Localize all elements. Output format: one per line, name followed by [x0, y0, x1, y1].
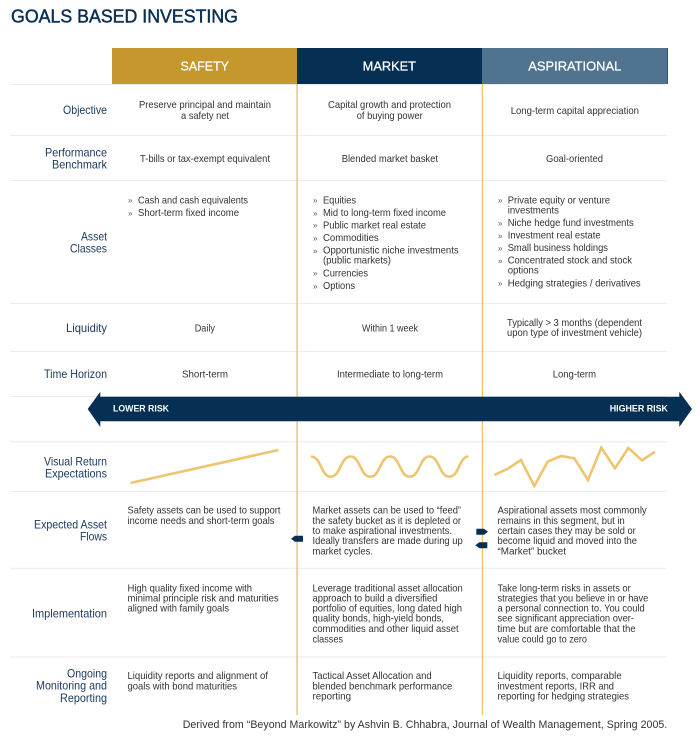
aspirational implementation: value could go to zero [498, 634, 587, 645]
market asset list: » [313, 246, 318, 256]
safety implementation: aligned with family goals [128, 604, 229, 615]
safety flows: income needs and short-term goals [128, 516, 274, 527]
aspirational flows [498, 505, 648, 557]
aspirational asset list: Hedging strategies / derivatives [508, 278, 641, 289]
market flows [312, 505, 463, 557]
higher risk label: HIGHER RISK [610, 404, 668, 414]
market flows: to make aspirational investments. [312, 526, 452, 537]
aspirational asset list: options [508, 266, 539, 277]
market asset list: Options [323, 281, 355, 292]
source footnote: Derived from “Beyond Markowitz” by Ashvin B. Chhabra, Journal of Wealth Management, Spring 2005. [183, 719, 667, 731]
market flows: market cycles. [312, 546, 373, 557]
safety monitoring [128, 671, 268, 693]
header: safety [112, 48, 297, 84]
row: expected asset flows [34, 505, 648, 557]
aspirational asset list: » [498, 219, 503, 228]
market benchmark: Blended market basket [342, 154, 438, 165]
header: market [297, 48, 482, 84]
market monitoring: blended benchmark performance [312, 682, 453, 693]
row: liquidity [66, 318, 642, 339]
aspirational asset list: » [498, 244, 503, 253]
safety asset list: » [128, 196, 133, 205]
market monitoring [312, 671, 453, 703]
market objective [328, 100, 451, 122]
label: performance benchmark [45, 146, 108, 172]
chart: safety straight line [130, 450, 278, 483]
label: ongoing monitoring and reporting: Monitoring and [36, 679, 107, 693]
market asset list: (public markets) [323, 256, 391, 267]
aspirational monitoring: reporting for hedging strategies [498, 692, 629, 703]
aspirational horizon: Long-term [553, 370, 596, 381]
aspirational implementation: Take long-term risks in assets or [498, 584, 631, 595]
label: liquidity: Liquidity [66, 321, 107, 335]
market horizon: Intermediate to long-term [337, 370, 443, 381]
title: GOALS BASED INVESTING [11, 6, 238, 26]
risk arrow [88, 392, 692, 427]
aspirational asset list: Private equity or venture [508, 195, 610, 206]
market implementation: portfolio of equities, long dated high [312, 604, 462, 615]
header: aspirational: ASPIRATIONAL [528, 60, 621, 74]
market asset list [313, 195, 459, 292]
aspirational implementation [498, 584, 649, 645]
label: visual return expectations [44, 454, 107, 480]
aspirational asset list: » [498, 196, 503, 205]
aspirational asset list: Investment real estate [508, 231, 601, 242]
row: performance benchmark [45, 146, 603, 172]
row: ongoing monitoring and reporting [36, 667, 629, 705]
row: visual return expectations [44, 448, 655, 486]
safety horizon: Short-term [182, 370, 228, 381]
aspirational monitoring [498, 671, 629, 703]
aspirational flows: certain cases they may be sold or [498, 526, 636, 537]
market asset list: Public market real estate [323, 220, 426, 231]
column divider: market / aspirational [482, 84, 483, 715]
flow arrow: market to aspirational [476, 529, 488, 535]
aspirational flows: become liquid and moved into the [498, 536, 637, 547]
market implementation: commodities and other liquid asset [312, 624, 459, 635]
label: asset classes: Asset [81, 229, 108, 243]
aspirational flows: “Market” bucket [498, 546, 566, 557]
market objective: Capital growth and protection [328, 100, 451, 111]
label: expected asset flows: Flows [80, 530, 107, 544]
aspirational asset list: investments [508, 205, 559, 216]
header: safety: SAFETY [180, 60, 230, 74]
aspirational asset list: » [498, 279, 503, 288]
aspirational flows: Aspirational assets most commonly [498, 505, 648, 516]
market flows: the safety bucket as it is depleted or [312, 516, 462, 527]
label: expected asset flows [34, 518, 108, 544]
safety asset list [128, 195, 248, 219]
row: asset classes [70, 195, 641, 292]
safety objective [139, 100, 271, 122]
label: visual return expectations: Expectations [45, 466, 107, 480]
market monitoring: reporting [312, 692, 351, 703]
safety implementation: High quality fixed income with [128, 584, 252, 595]
aspirational flows: remains in this segment, but in [498, 516, 625, 527]
label: ongoing monitoring and reporting: Reporting [60, 691, 107, 705]
label: expected asset flows: Expected Asset [34, 518, 108, 532]
market asset list: » [313, 282, 318, 291]
aspirational asset list: Concentrated stock and stock [508, 256, 633, 267]
label: ongoing monitoring and reporting [36, 667, 107, 705]
label: implementation: Implementation [32, 606, 107, 620]
aspirational implementation: strategies that you believe in or have [498, 594, 649, 605]
header: market: MARKET [363, 60, 416, 74]
aspirational asset list [498, 195, 641, 289]
label: performance benchmark: Performance [45, 146, 107, 160]
aspirational asset list: Small business holdings [508, 243, 608, 254]
row: time horizon [44, 367, 596, 381]
label: performance benchmark: Benchmark [52, 158, 108, 172]
safety objective: a safety net [181, 111, 229, 122]
label: objective: Objective [63, 103, 107, 117]
header: aspirational [482, 48, 668, 84]
market asset list: » [313, 209, 318, 218]
market liquidity: Within 1 week [362, 323, 419, 334]
market implementation: approach to build a diversified [312, 594, 438, 605]
market asset list: » [313, 196, 318, 205]
market asset list: Currencies [323, 268, 368, 279]
chart: market wave [311, 456, 468, 477]
safety benchmark: T-bills or tax-exempt equivalent [140, 154, 270, 165]
label: asset classes: Classes [70, 241, 107, 255]
aspirational implementation: see significant appreciation over- [498, 614, 634, 625]
flow arrow: aspirational to market [475, 542, 487, 548]
market flows: Market assets can be used to “feed” [312, 505, 462, 516]
aspirational liquidity: upon type of investment vehicle) [507, 328, 642, 339]
market implementation: quality bonds, high-yield bonds, [312, 614, 444, 625]
aspirational asset list: Niche hedge fund investments [508, 218, 634, 229]
safety implementation [128, 584, 279, 615]
market objective: of buying power [357, 111, 423, 122]
safety asset list: Cash and cash equivalents [138, 195, 248, 206]
aspirational monitoring: investment reports, IRR and [498, 682, 614, 693]
market asset list: Opportunistic niche investments [323, 246, 459, 257]
chart: aspirational jagged line [494, 448, 655, 486]
market asset list: Equities [323, 195, 356, 206]
aspirational implementation: a personal connection to. You could [498, 604, 645, 615]
aspirational implementation: time but are comfortable that the [498, 624, 636, 635]
market flows: Ideally transfers are made during up [312, 536, 463, 547]
aspirational asset list: » [498, 232, 503, 240]
safety objective: Preserve principal and maintain [139, 100, 271, 111]
market implementation: Leverage traditional asset allocation [312, 584, 463, 595]
market asset list: » [313, 269, 318, 278]
market implementation [312, 584, 463, 645]
market asset list: » [313, 234, 318, 243]
safety monitoring: Liquidity reports and alignment of [128, 671, 268, 682]
market monitoring: Tactical Asset Allocation and [312, 671, 432, 682]
market asset list: Mid to long-term fixed income [323, 208, 446, 219]
label: visual return expectations: Visual Return [44, 454, 107, 468]
aspirational liquidity: Typically > 3 months (dependent [507, 318, 642, 329]
market asset list: Commodities [323, 233, 379, 244]
row: implementation [32, 584, 649, 645]
column headers [112, 48, 668, 84]
label: time horizon: Time Horizon [44, 367, 107, 381]
safety implementation: minimal principle risk and maturities [128, 594, 279, 605]
column divider: safety / market [296, 84, 298, 715]
label: asset classes [70, 229, 108, 255]
aspirational benchmark: Goal-oriented [546, 154, 603, 165]
aspirational objective: Long-term capital appreciation [511, 106, 639, 117]
aspirational liquidity [507, 318, 642, 339]
safety monitoring: goals with bond maturities [128, 682, 237, 693]
aspirational asset list: » [498, 256, 503, 266]
label: ongoing monitoring and reporting: Ongoing [67, 667, 107, 681]
safety flows [128, 505, 281, 527]
safety asset list: » [128, 209, 133, 218]
market implementation: classes [312, 634, 343, 645]
flow arrow: market to safety [291, 536, 303, 542]
aspirational monitoring: Liquidity reports, comparable [498, 671, 622, 682]
safety liquidity: Daily [195, 323, 216, 334]
row: objective [63, 100, 639, 122]
safety asset list: Short-term fixed income [138, 208, 239, 219]
safety flows: Safety assets can be used to support [128, 505, 281, 516]
market asset list: » [313, 221, 318, 230]
lower risk label: LOWER RISK [113, 404, 169, 414]
